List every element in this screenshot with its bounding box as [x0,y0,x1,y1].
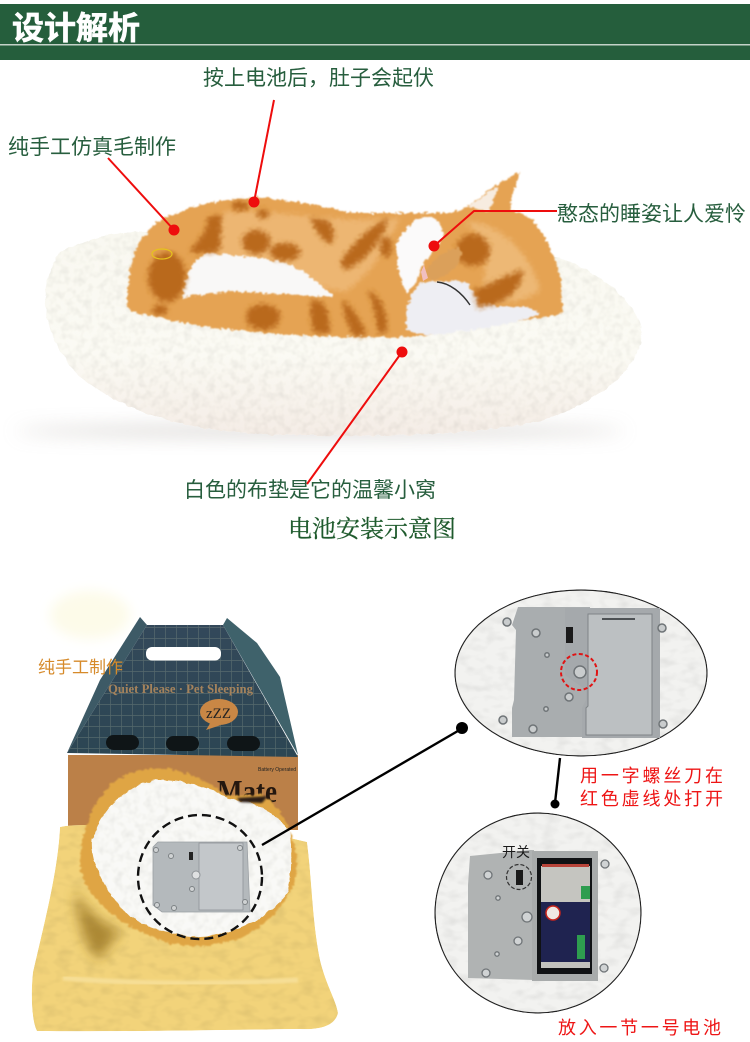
cat nose and closed eye [421,265,428,281]
pad stitched border [63,978,298,983]
box side flaps [67,617,147,753]
box brand text: Mate [217,773,277,809]
header banner [0,4,750,60]
callout: white cushion: 白色的布垫是它的温馨小窝 [184,479,436,502]
callout: sleeping pose [428,203,746,252]
cover housing [565,608,660,738]
callout: sleeping pose: 憨态的睡姿让人爱怜 [557,203,746,226]
cat light fur [205,211,400,292]
scorched notch [237,796,268,803]
callout: belly rises and falls [203,67,434,208]
gold logo [152,249,172,259]
white chest and neck [397,216,443,293]
detail: closed battery cover oval [455,590,707,756]
white face and paw [406,281,540,335]
zzz bubble: zZZ [206,706,231,722]
overlaid label: 纯手工制作 [38,658,123,677]
instruction: open with screwdriver: 红色虚线处打开 [580,789,723,809]
section title: battery installation: 电池安装示意图 [288,516,456,543]
callout: handmade fur: 纯手工仿真毛制作 [8,136,176,159]
battery [541,864,590,968]
photo: box with cat underside on yellow pad [32,591,468,1031]
white inner ear [468,187,497,212]
cat body [127,172,562,337]
white belly [182,253,333,298]
pad fold shading [75,890,120,960]
zzz bubble [200,699,238,730]
white underside [92,780,291,937]
box slogan: Quiet Please · Pet Sleeping [108,681,253,696]
battery cover [586,614,652,735]
connector line [262,722,468,845]
switch recess [506,864,532,890]
cat stripes [148,201,523,336]
red dashed circle [561,654,597,690]
plate [468,850,534,980]
instruction: open with screwdriver [580,766,723,809]
instruction: open with screwdriver: 用一字螺丝刀在 [580,766,723,786]
white cushion [45,232,642,436]
switch label: 开关 [502,844,530,860]
connector between details [550,758,560,808]
cushion shadow [15,425,625,437]
callout: belly rises and falls: 按上电池后，肚子会起伏 [203,67,434,90]
fur rim of cat [80,768,297,946]
yellow pad [32,825,338,1031]
screws [499,618,667,733]
callout: handmade fur [8,136,180,236]
box handle [146,647,221,660]
product photo: sleeping cat on cushion [15,172,642,437]
small battery plate [153,842,250,912]
heading: design analysis: 设计解析 [12,10,140,46]
carrier box roof [67,625,298,757]
switch [566,627,573,643]
detail: open battery compartment circle [435,813,641,1013]
box small print: Battery Operated [258,767,296,773]
dashed circle [138,815,262,939]
plate [512,607,590,737]
box ventilation holes [106,735,260,751]
compartment frame [532,851,598,981]
callout: white cushion [184,346,436,502]
screws [482,860,609,977]
faded glow [50,591,130,639]
tan nose bridge [425,247,462,281]
instruction: insert battery: 放入一节一号电池 [558,1018,721,1038]
carrier box cardboard [68,755,298,830]
